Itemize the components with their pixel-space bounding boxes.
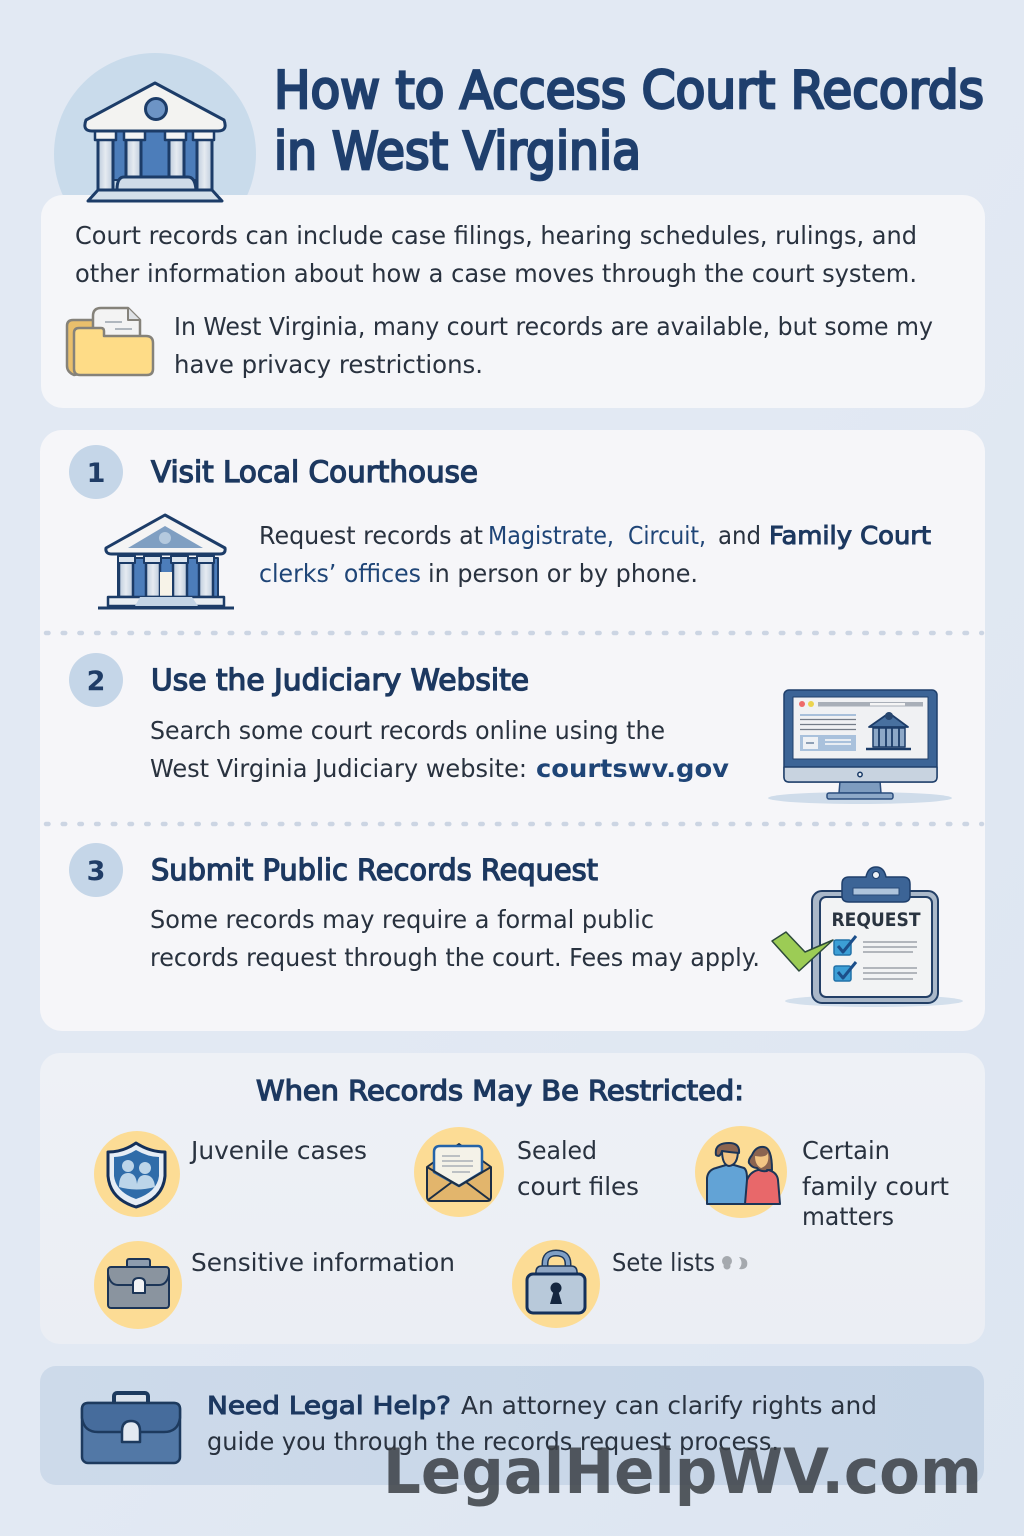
title: in West Virginia	[274, 122, 641, 182]
icon: courthouse header emblem	[85, 83, 225, 201]
watermark: LegalHelpWV.com: LegalHelpWV.com	[383, 1435, 982, 1508]
heading: submit public records request: Submit Public Records Request	[151, 853, 598, 887]
text block: step 1 description: clerks’ offices	[259, 559, 421, 588]
icon: courthouse	[98, 515, 234, 608]
label: Sete lists	[612, 1248, 715, 1277]
icon: folder with document	[67, 308, 153, 375]
step 2	[69, 653, 952, 804]
text block: step 3 description	[150, 905, 760, 972]
step number 1: 1	[87, 458, 105, 489]
text block: step 1 description: Family Court	[769, 521, 931, 550]
text block: legal help: An attorney can clarify rights and	[461, 1391, 877, 1420]
step number 1	[69, 445, 123, 499]
icon: faint speech marks	[722, 1256, 747, 1270]
text block: step 1 description: Circuit,	[628, 521, 706, 550]
panel: when records may be restricted	[40, 1053, 985, 1344]
heading: when records may be restricted: When Records May Be Restricted:	[256, 1074, 744, 1107]
text block: legal help: Need Legal Help?	[207, 1391, 451, 1420]
text block: step 3 description: Some records may require a formal public	[150, 905, 654, 934]
item: certain family court matters	[695, 1126, 949, 1231]
panel: introduction	[41, 195, 985, 408]
title: How to Access Court Records	[274, 61, 984, 121]
step 3	[69, 843, 963, 1007]
text block: step 1 description: Request records at	[259, 521, 483, 550]
title	[274, 61, 984, 182]
icon: circle behind courthouse emblem	[54, 53, 256, 255]
icon: two people	[695, 1126, 787, 1218]
text block: step 2 description: Search some court records online using the	[150, 716, 665, 745]
icon: padlock	[512, 1240, 600, 1328]
heading: visit local courthouse: Visit Local Courthouse	[151, 455, 478, 489]
icon: request clipboard with check marks	[772, 867, 963, 1007]
item: sealed court files	[414, 1127, 639, 1217]
panel: steps	[40, 430, 985, 1031]
label: court files	[517, 1172, 639, 1201]
icon: blue briefcase	[82, 1393, 180, 1463]
text block: step 3 description: records request through the court. Fees may apply.	[150, 943, 760, 972]
text block: legal help: guide you through the records request process.	[207, 1427, 779, 1456]
text block: step 1 description	[259, 521, 931, 588]
step 1	[69, 445, 931, 608]
label	[517, 1136, 639, 1201]
label: family court	[802, 1172, 949, 1201]
step number 3	[69, 843, 123, 897]
icon: shield with people	[94, 1131, 180, 1217]
step number 2	[69, 653, 123, 707]
label: Certain	[802, 1136, 890, 1165]
step number 3: 3	[87, 856, 105, 887]
text block: step 1 description: and	[718, 521, 761, 550]
item: sensitive information	[94, 1241, 455, 1329]
text block: step 2 description	[150, 716, 729, 783]
icon: locked briefcase	[94, 1241, 182, 1329]
label: Sensitive information	[191, 1248, 455, 1277]
text block: privacy note: In West Virginia, many court records are available, but some my	[174, 312, 933, 341]
icon: request clipboard with check marks: REQUEST	[832, 909, 921, 931]
text block: what court records include: Court records can include case filings, hearing schedules, rulings, and	[75, 221, 917, 250]
text block: step 2 description: West Virginia Judiciary website:	[150, 754, 527, 783]
label: matters	[802, 1202, 894, 1231]
text block: step 1 description: Magistrate,	[488, 521, 614, 550]
text block: what court records include: other information about how a case moves through the court system.	[75, 259, 917, 288]
label: Juvenile cases	[189, 1136, 367, 1165]
text block: privacy note: have privacy restrictions.	[174, 350, 483, 379]
text block: privacy note	[174, 312, 933, 379]
icon: computer monitor showing court website	[768, 690, 952, 804]
panel: need legal help	[40, 1366, 984, 1485]
text block: step 1 description: in person or by phone.	[428, 559, 698, 588]
icon: open envelope	[414, 1127, 504, 1217]
text block: what court records include	[75, 221, 917, 288]
label: Sealed	[517, 1136, 597, 1165]
item: juvenile cases	[94, 1131, 367, 1217]
item: sete lists	[512, 1240, 747, 1328]
label	[802, 1136, 949, 1231]
step number 2: 2	[87, 666, 105, 697]
heading: use the judiciary website: Use the Judiciary Website	[151, 663, 529, 697]
text block: step 2 description: courtswv.gov	[536, 754, 729, 783]
text block: legal help	[207, 1391, 877, 1456]
